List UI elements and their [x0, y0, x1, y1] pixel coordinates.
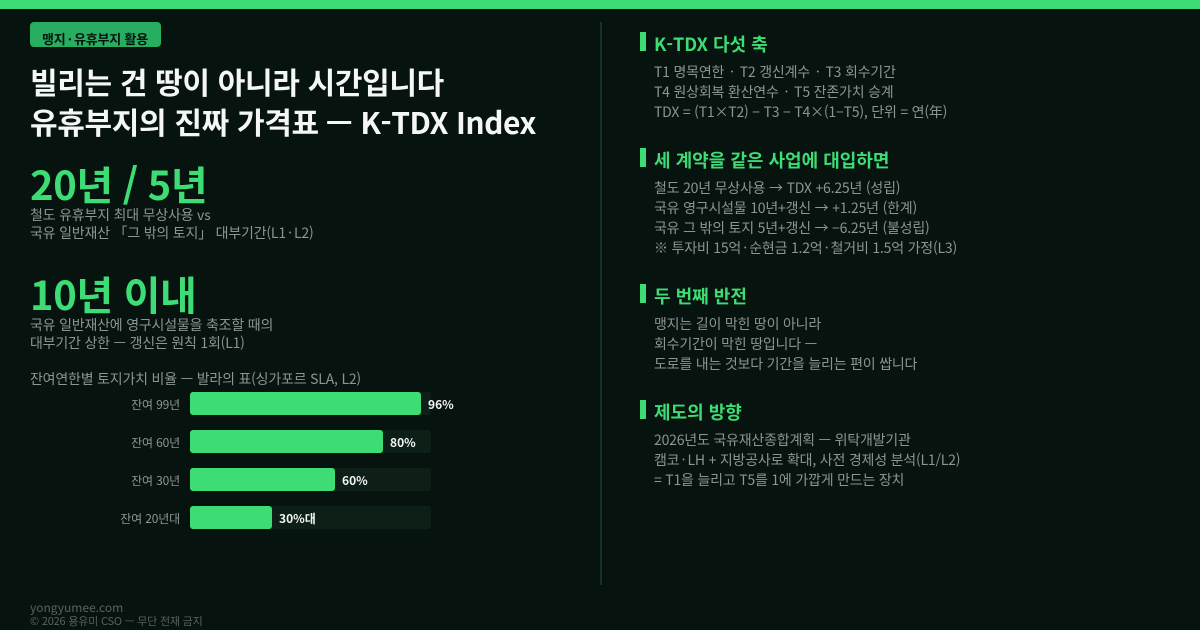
- bar: 잔여 60년: [131, 430, 431, 453]
- body text: 국유 그 밖의 토지 5년+갱신 → −6.25년 (불성립): [654, 218, 930, 238]
- title: [30, 59, 536, 143]
- body text: = T1을 늘리고 T5를 1에 가깝게 만드는 장치: [654, 470, 904, 490]
- bar: 잔여 99년: 96%: [428, 396, 454, 413]
- stat: 10년 이내: 10년 이내: [30, 264, 196, 322]
- bar chart: [120, 392, 454, 529]
- body text: [654, 62, 947, 122]
- body text: T4 원상회복 환산연수 · T5 잔존가치 승계: [654, 82, 893, 102]
- bar: 잔여 20년대: [120, 506, 431, 529]
- heading: 세 계약을 같은 사업에 대입하면: [654, 147, 889, 173]
- bar: 잔여 60년: 잔여 60년: [131, 434, 180, 451]
- body text: TDX = (T1×T2) − T3 − T4×(1−T5), 단위 = 연(年): [654, 102, 947, 122]
- tag badge: [30, 22, 161, 47]
- section marker: [640, 148, 646, 167]
- section marker: [640, 400, 646, 419]
- bar: 잔여 30년: 잔여 30년: [131, 472, 180, 489]
- body text: [654, 430, 960, 490]
- heading: 두 번째 반전: [654, 283, 747, 309]
- bar: 잔여 20년대: 잔여 20년대: [120, 510, 180, 527]
- heading: 제도의 방향: [654, 399, 742, 425]
- title: 유휴부지의 진짜 가격표 — K-TDX Index: [30, 99, 536, 143]
- bar: 잔여 20년대: 30%대: [279, 510, 316, 527]
- body text: 맹지는 길이 막힌 땅이 아니라: [654, 314, 821, 334]
- title: 빌리는 건 땅이 아니라 시간입니다: [30, 59, 444, 103]
- section marker: [640, 284, 646, 303]
- section: 제도의 방향: [640, 399, 960, 490]
- body text: 철도 20년 무상사용 → TDX +6.25년 (성립): [654, 178, 900, 198]
- body text: 회수기간이 막힌 땅입니다 —: [654, 334, 817, 354]
- body text: [654, 178, 957, 258]
- footer: © 2026 용유미 CSO — 무단 전재 금지: [30, 613, 203, 629]
- stat: 20년 / 5년: 20년 / 5년: [30, 154, 207, 212]
- body text: ※ 투자비 15억·순현금 1.2억·철거비 1.5억 가정(L3): [654, 238, 957, 258]
- body text: 도로를 내는 것보다 기간을 늘리는 편이 쌉니다: [654, 354, 917, 374]
- section marker: [640, 32, 646, 51]
- stat description: 10년 이내: 대부기간 상한 — 갱신은 원칙 1회(L1): [30, 333, 245, 353]
- footer: yongyumee.com: [30, 599, 123, 616]
- body text: 캠코·LH + 지방공사로 확대, 사전 경제성 분석(L1/L2): [654, 450, 960, 470]
- stat description: 10년 이내: 국유 일반재산에 영구시설물을 축조할 때의: [30, 315, 273, 335]
- body text: 국유 영구시설물 10년+갱신 → +1.25년 (한계): [654, 198, 917, 218]
- bar: 잔여 99년: 잔여 99년: [131, 396, 180, 413]
- section: 세 계약: [640, 147, 957, 258]
- bar: 잔여 99년: [131, 392, 454, 415]
- stat description: 20년 / 5년: 철도 유휴부지 최대 무상사용 vs: [30, 205, 210, 225]
- bar: 잔여 30년: [131, 468, 431, 491]
- bar: 잔여 30년: 60%: [342, 472, 368, 489]
- column divider: [600, 22, 602, 585]
- bar: 잔여 60년: 80%: [390, 434, 416, 451]
- body text: 2026년도 국유재산종합계획 — 위탁개발기관: [654, 430, 911, 450]
- section: K-TDX 다섯 축: [640, 31, 947, 122]
- stat description: 10년 이내: [30, 315, 273, 353]
- section: 두 번째 반전: [640, 283, 917, 374]
- body text: T1 명목연한 · T2 갱신계수 · T3 회수기간: [654, 62, 896, 82]
- chart title: 잔여연한별 토지가치 비율 — 발라의 표(싱가포르 SLA, L2): [30, 369, 361, 389]
- footer: [30, 599, 203, 629]
- heading: K-TDX 다섯 축: [654, 31, 768, 57]
- top accent bar: [0, 0, 1200, 9]
- body text: [654, 314, 917, 374]
- stat description: 20년 / 5년: [30, 205, 314, 243]
- stat description: 20년 / 5년: 국유 일반재산 「그 밖의 토지」 대부기간(L1·L2): [30, 223, 314, 243]
